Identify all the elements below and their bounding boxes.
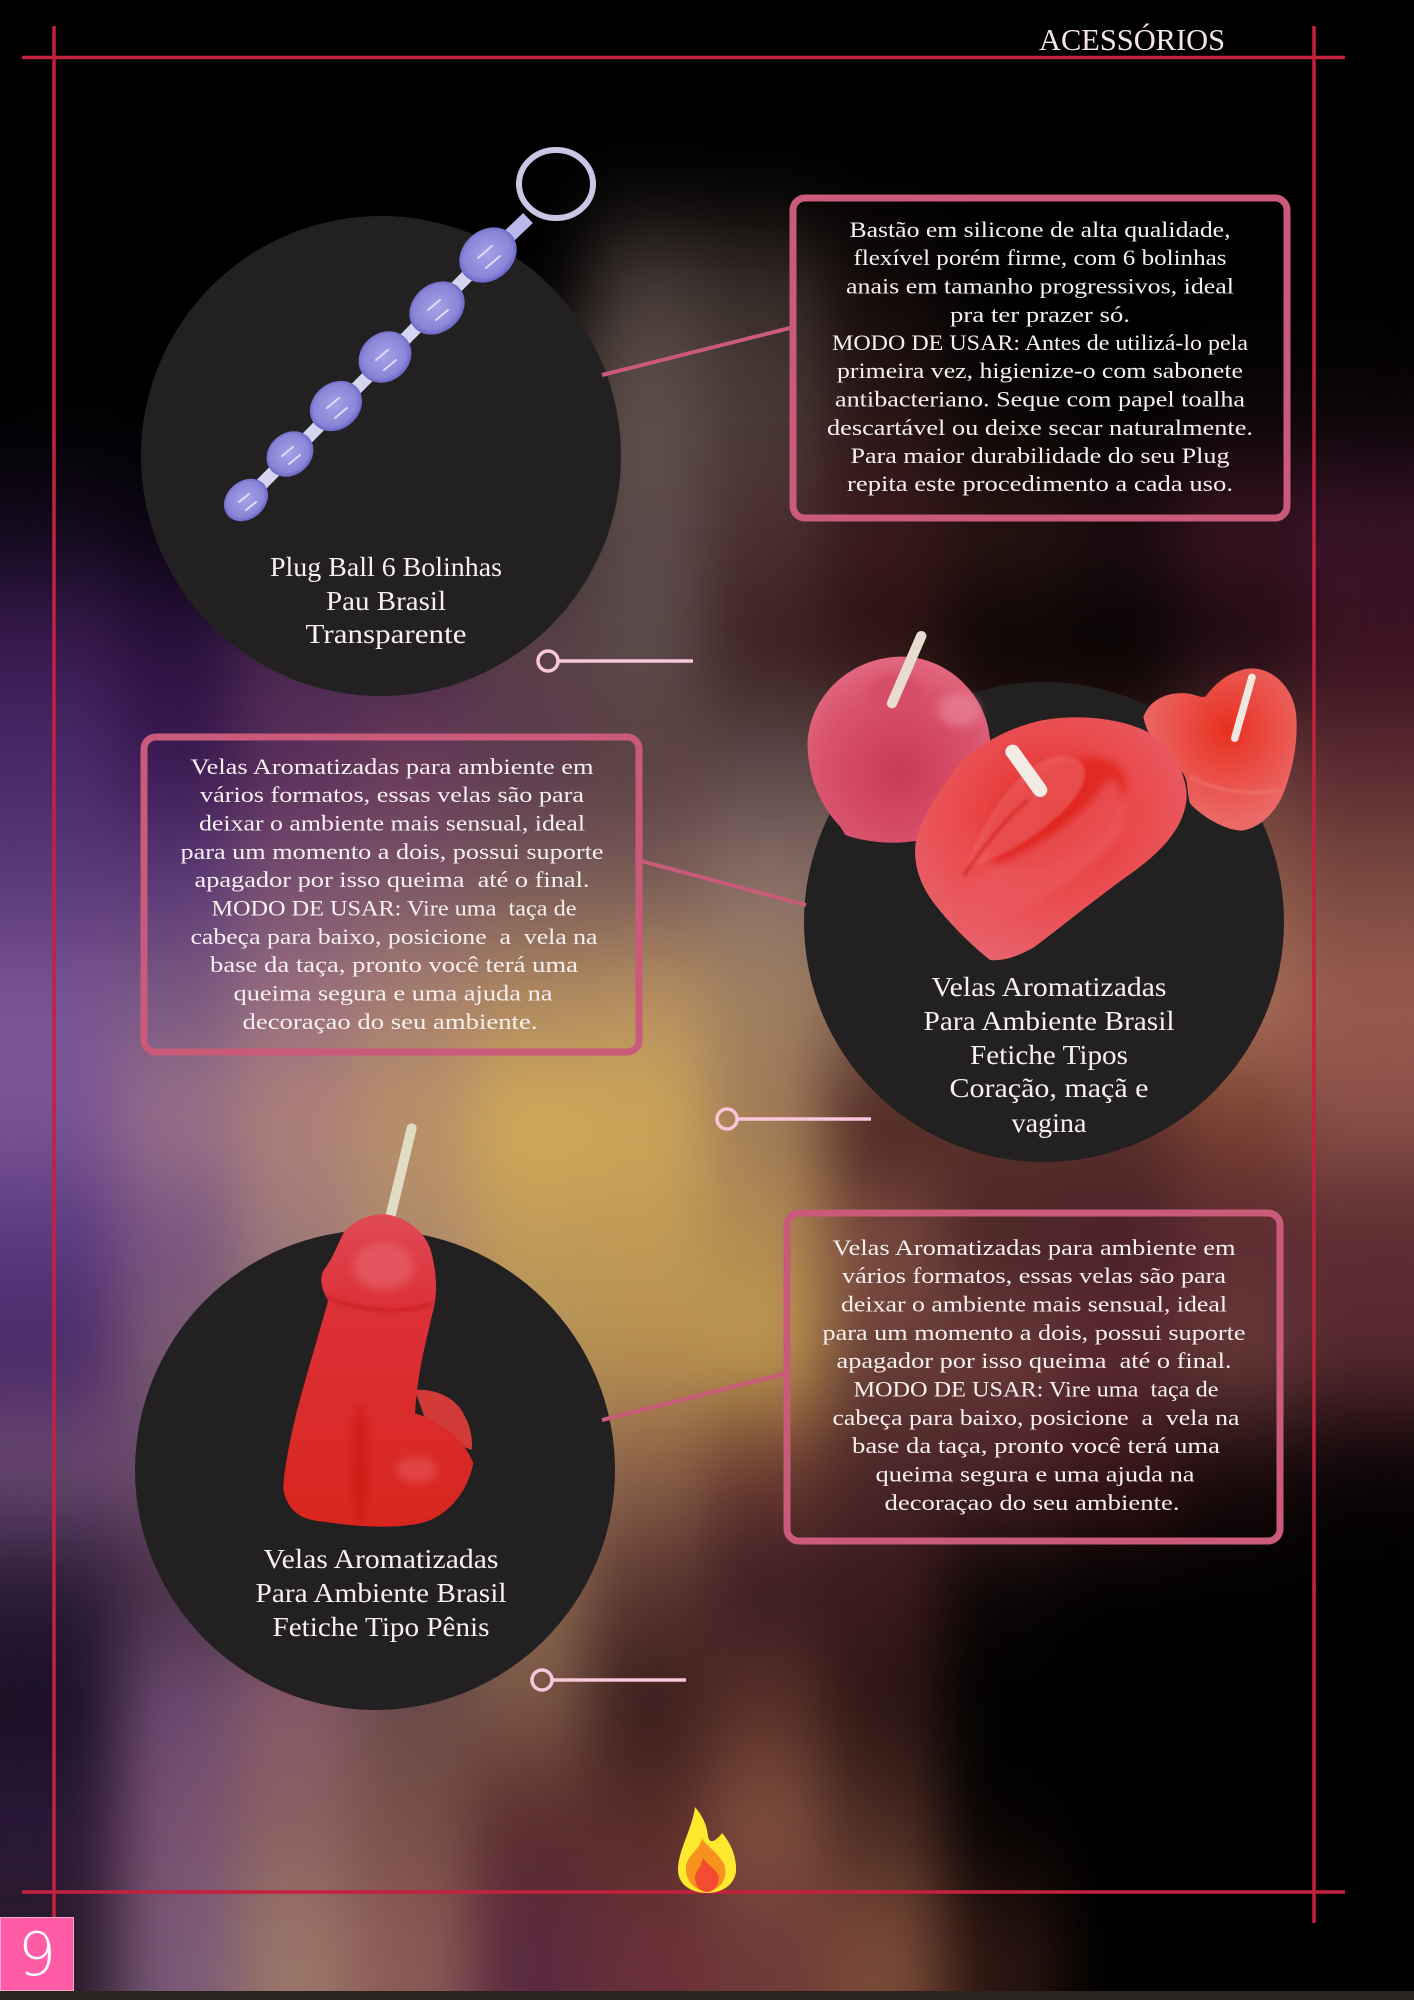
pin marker: velas tipos: [717, 1109, 871, 1129]
description box: vela pênis: base da taça, pronto você terá uma: [852, 1433, 1220, 1458]
title: velas tipos: Coração, maçã e: [950, 1073, 1149, 1103]
title: vela pênis: Velas Aromatizadas: [264, 1544, 498, 1574]
title: vela pênis: Para Ambiente Brasil: [256, 1578, 506, 1608]
description box: vela pênis: queima segura e uma ajuda na: [876, 1462, 1195, 1486]
description box: plug ball: MODO DE USAR: Antes de utilizá-lo pela: [832, 330, 1248, 355]
description box: velas tipos: decoraçao do seu ambiente.: [242, 1009, 538, 1034]
bottom strip: [0, 1991, 1414, 2000]
description box: velas tipos: MODO DE USAR: Vire uma taça de: [212, 896, 576, 920]
panel: plug ball: [141, 150, 621, 696]
panel: vela pênis: [135, 1128, 615, 1710]
description box: plug ball: descartável ou deixe secar naturalmente.: [827, 415, 1253, 440]
icon: penis candle: [283, 1128, 473, 1527]
description box: vela pênis: MODO DE USAR: Vire uma taça de: [854, 1376, 1218, 1402]
description box: plug ball: pra ter prazer só.: [950, 302, 1130, 327]
description box: vela pênis: vários formatos, essas velas são para: [842, 1263, 1226, 1288]
icon: heart candle: [1143, 668, 1297, 831]
description box: vela pênis: decoraçao do seu ambiente.: [884, 1490, 1180, 1515]
description box: velas tipos: vários formatos, essas velas são para: [200, 782, 584, 807]
description box: plug ball: Bastão em silicone de alta qualidade,: [850, 217, 1230, 242]
title: vela pênis: Fetiche Tipo Pênis: [272, 1612, 490, 1642]
description box: vela pênis: [787, 1213, 1280, 1541]
title: plug ball: Transparente: [306, 619, 467, 649]
panel: velas tipos: [804, 636, 1297, 1162]
description box: vela pênis: apagador por isso queima até o final.: [836, 1348, 1232, 1373]
icon: flame: [678, 1807, 736, 1893]
description box: plug ball: flexível porém firme, com 6 bolinhas: [854, 245, 1226, 270]
connector: velas tipos to description: [641, 861, 806, 905]
pin marker: plug ball: [538, 651, 693, 671]
title: plug ball: [270, 552, 502, 649]
title: plug ball: Plug Ball 6 Bolinhas: [270, 552, 502, 582]
description box: vela pênis: cabeça para baixo, posicione a vela na: [832, 1405, 1240, 1430]
description box: plug ball: [793, 198, 1287, 518]
description box: velas tipos: Velas Aromatizadas para ambiente em: [190, 754, 594, 779]
description box: velas tipos: para um momento a dois, possui suporte: [180, 839, 604, 864]
description box: velas tipos: queima segura e uma ajuda na: [234, 980, 553, 1006]
description box: velas tipos: [144, 737, 639, 1052]
description box: velas tipos: cabeça para baixo, posicione a vela na: [190, 924, 598, 949]
title: velas tipos: Para Ambiente Brasil: [924, 1006, 1174, 1036]
page number: [0, 1918, 74, 1990]
circle: vela pênis: [135, 1230, 615, 1710]
description box: vela pênis: para um momento a dois, possui suporte: [822, 1320, 1246, 1345]
description box: plug ball: antibacteriano. Seque com papel toalha: [835, 386, 1245, 412]
title: velas tipos: Fetiche Tipos: [970, 1040, 1128, 1070]
description box: velas tipos: deixar o ambiente mais sensual, ideal: [199, 810, 585, 836]
description box: velas tipos: apagador por isso queima até o final.: [194, 867, 590, 892]
description box: plug ball: primeira vez, higienize-o com sabonete: [837, 358, 1243, 383]
description box: vela pênis: Velas Aromatizadas para ambiente em: [832, 1235, 1236, 1260]
title: plug ball: Pau Brasil: [326, 586, 446, 616]
page heading: ACESSÓRIOS: [1039, 22, 1225, 57]
connector: plug ball to description: [602, 328, 790, 375]
description box: velas tipos: base da taça, pronto você terá uma: [210, 952, 578, 977]
title: velas tipos: Velas Aromatizadas: [932, 972, 1166, 1002]
title: velas tipos: [924, 972, 1174, 1138]
icon: apple candle: [808, 636, 990, 843]
icon: candles: [808, 636, 1297, 960]
circle: plug ball: [141, 216, 621, 696]
title: vela pênis: [256, 1544, 506, 1642]
icon: vulva candle: [915, 717, 1187, 960]
description box: vela pênis: deixar o ambiente mais sensual, ideal: [841, 1292, 1227, 1316]
connector: vela pênis to description: [602, 1374, 784, 1420]
page number: 9: [18, 1920, 56, 1990]
description box: plug ball: anais em tamanho progressivos, ideal: [846, 274, 1234, 298]
circle: velas tipos: [804, 682, 1284, 1162]
pin marker: vela pênis: [532, 1670, 686, 1690]
description box: plug ball: repita este procedimento a cada uso.: [847, 471, 1233, 496]
icon: plug ball beads: [215, 150, 593, 530]
title: velas tipos: vagina: [1012, 1108, 1087, 1138]
description box: plug ball: Para maior durabilidade do seu Plug: [850, 443, 1230, 468]
